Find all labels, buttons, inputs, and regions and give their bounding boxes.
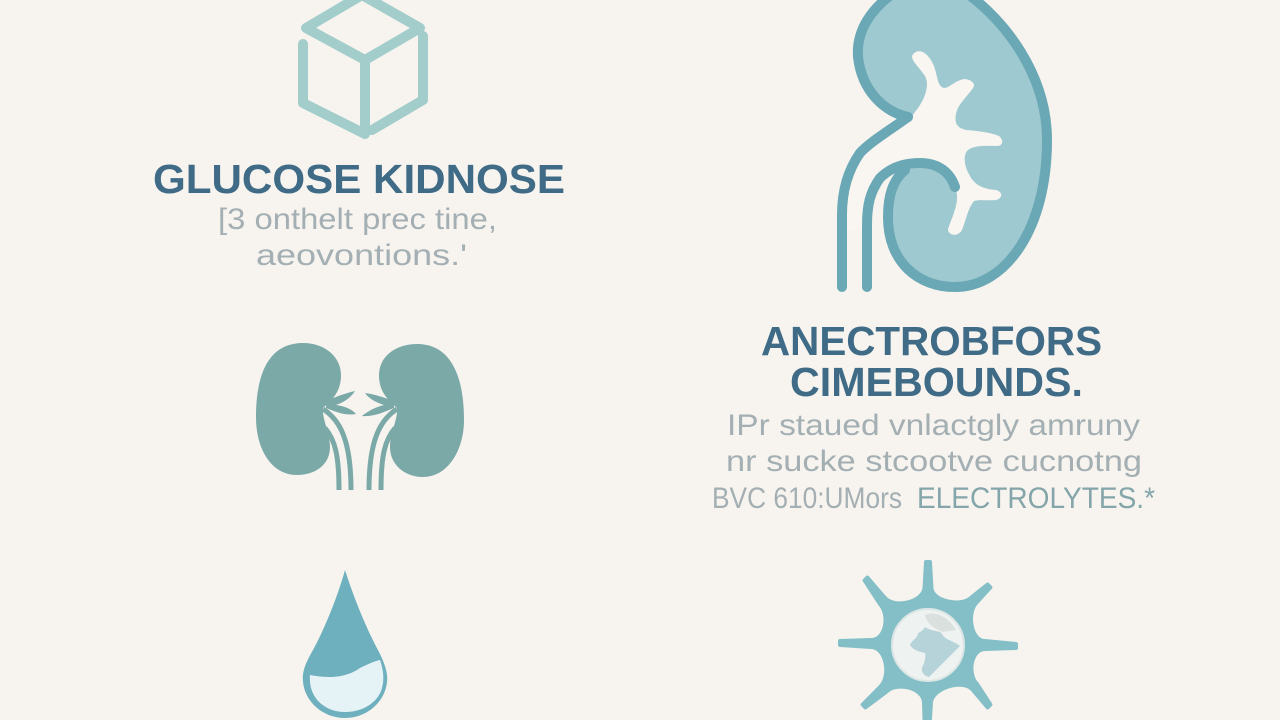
icon: large kidney (842, 0, 1047, 287)
outer tubes (325, 428, 395, 490)
heading: glucose kidnose: GLUCOSE KIDNOSE (153, 156, 565, 202)
drop water level (310, 660, 383, 712)
vessels (326, 391, 394, 416)
icon: electrolyte globe (840, 562, 1016, 720)
text block: right description: nr sucke stcootve cucnotng (726, 445, 1142, 478)
left kidney (256, 343, 341, 475)
renal pelvis (842, 51, 1002, 235)
text block: right description: BVC 610:UMors (712, 482, 902, 515)
text block: left description: aeovontions.' (256, 239, 467, 272)
heading: anectrobfors cimebounds: CIMEBOUNDS. (790, 359, 1083, 405)
icon: cube (303, 0, 423, 134)
drop body (303, 570, 387, 718)
icon: water drop (303, 570, 387, 718)
rays (840, 562, 1016, 720)
text block: right description: IPr staued vnlactgly amruny (727, 409, 1140, 442)
inner tubes (323, 409, 397, 490)
globe (892, 609, 964, 681)
text block: right description: ELECTROLYTES.* (917, 482, 1155, 515)
right kidney (379, 344, 464, 477)
icon: pair of kidneys (256, 343, 464, 490)
continent (910, 627, 960, 677)
inner ureter tube (867, 163, 955, 287)
heading: anectrobfors cimebounds: ANECTROBFORS (761, 318, 1102, 364)
text block: left description: [3 onthelt prec tine, (218, 203, 497, 236)
kidney outline (858, 0, 1047, 287)
outer ureter tube (842, 117, 908, 287)
text block: left description (218, 203, 497, 272)
text block: right description (712, 409, 1155, 515)
polar patch (925, 613, 956, 632)
kidney body (858, 0, 1047, 287)
heading: anectrobfors cimebounds (761, 318, 1102, 405)
